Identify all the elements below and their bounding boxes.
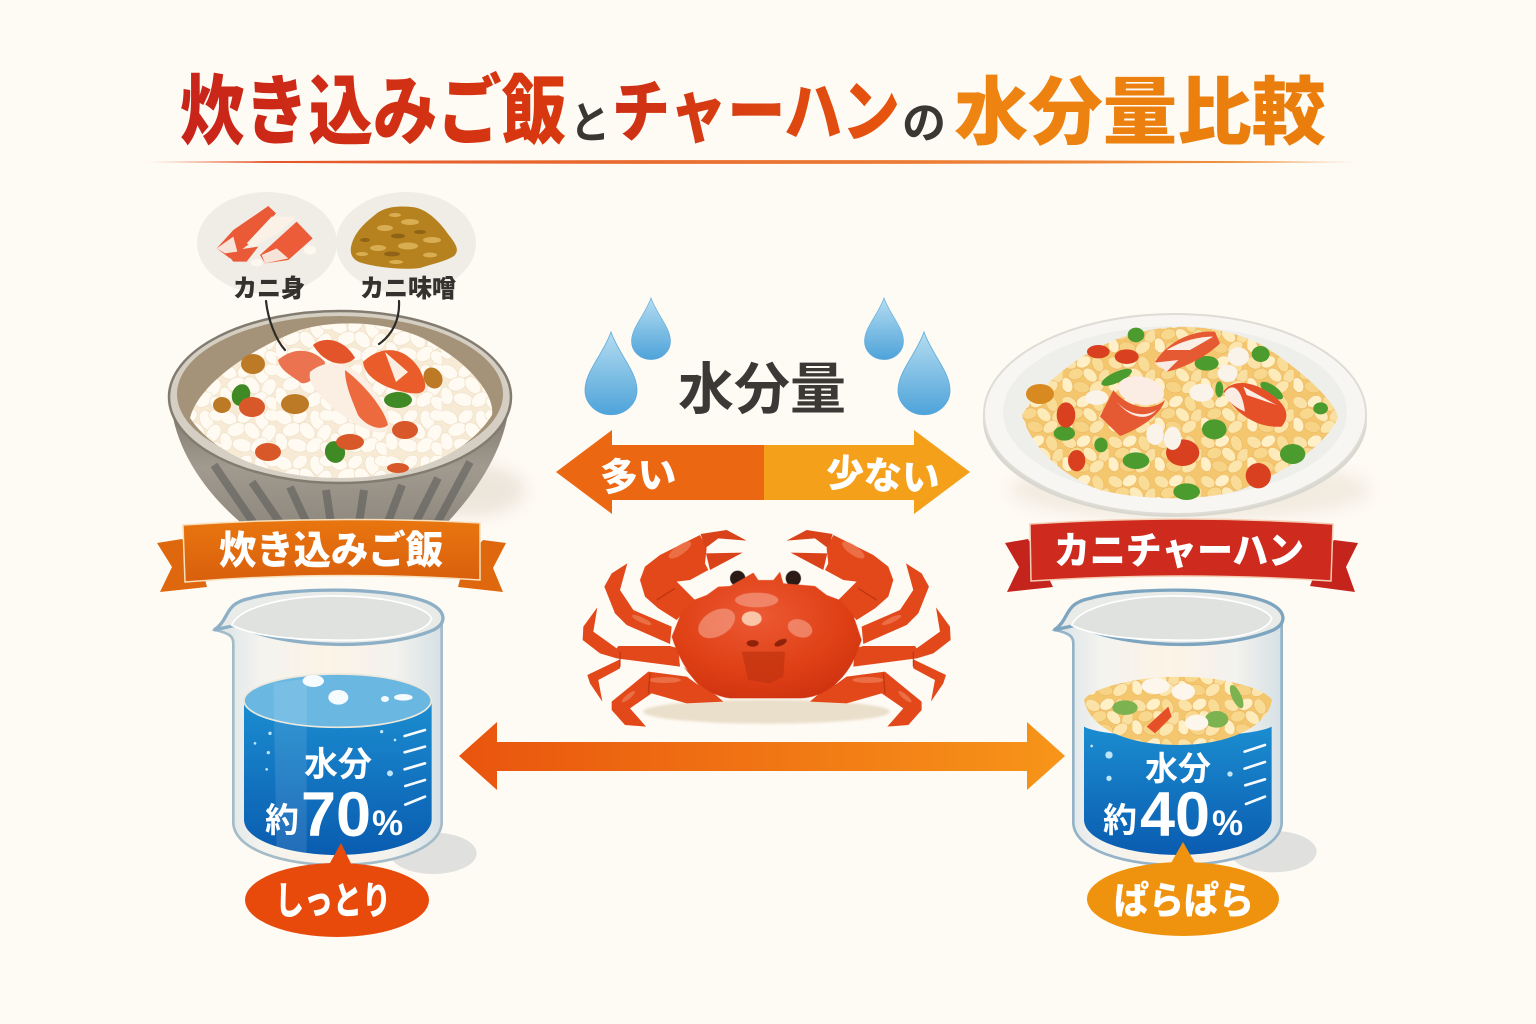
rice in beaker — [1084, 677, 1272, 745]
panel: beaker fried rice — [1054, 590, 1317, 936]
icon: crab — [583, 530, 951, 727]
crab shell — [672, 572, 862, 698]
label: crab meat: カニ身 — [233, 269, 305, 305]
icon: water drops — [585, 298, 950, 415]
crab eyes — [730, 571, 801, 586]
panel: takikomi rice — [169, 192, 525, 530]
title: と — [570, 87, 610, 151]
left legs and claw — [583, 530, 747, 727]
title: の — [902, 87, 946, 151]
panel: fried rice — [983, 314, 1370, 520]
vegetables and crab pieces — [213, 340, 446, 473]
beaker drawing — [214, 590, 477, 874]
arrow: long comparison — [459, 722, 1065, 790]
title — [180, 50, 1326, 160]
value: about 70 percent — [265, 780, 403, 850]
leader lines — [266, 301, 399, 350]
heading: moisture: 水分量 — [678, 345, 846, 426]
icon: bowl — [169, 311, 511, 530]
arrow: more / less — [556, 430, 970, 514]
banner: fried rice — [1005, 519, 1358, 592]
arrow: more / less: 多い — [599, 443, 677, 502]
title: チャーハン — [612, 57, 900, 156]
plate shadow — [1010, 460, 1370, 520]
callout: fluffy — [1087, 842, 1279, 936]
callout: fluffy: ぱらぱら — [1114, 870, 1254, 925]
value: about 70 percent: 70 — [301, 780, 371, 850]
beaker drawing — [1054, 590, 1317, 872]
banner: takikomi rice — [157, 519, 506, 592]
value: about 70 percent: 約 — [265, 793, 299, 842]
value: about 70 percent: % — [372, 804, 403, 843]
label: moisture: 水分 — [304, 737, 372, 786]
value: about 40 percent — [1103, 780, 1243, 850]
ingredient: crab meat — [197, 192, 337, 294]
scale ticks — [405, 730, 425, 805]
value: about 40 percent: % — [1212, 804, 1243, 843]
panel: moisture scale — [556, 298, 970, 514]
callout: moist — [245, 843, 429, 937]
fried rice mound — [1022, 327, 1338, 498]
callout: moist: しっとり — [275, 870, 391, 925]
right legs and claw — [787, 530, 951, 727]
ingredient: crab miso — [336, 192, 476, 294]
bowl shadow — [415, 464, 525, 516]
scale ticks — [1245, 745, 1265, 804]
panel: beaker takikomi — [214, 590, 477, 937]
label: crab miso: カニ味噌 — [360, 269, 456, 305]
label: moisture: 水分 — [1145, 742, 1211, 790]
vegetables and crab pieces — [1026, 328, 1328, 500]
banner label: カニチャーハン — [1054, 520, 1304, 575]
title underline — [145, 160, 1358, 164]
value: about 40 percent: 40 — [1140, 780, 1210, 850]
icon: plate — [983, 314, 1367, 517]
arrow: more / less: 少ない — [825, 442, 941, 503]
value: about 40 percent: 約 — [1103, 793, 1137, 842]
title: 水分量比較 — [954, 53, 1326, 160]
title: 炊き込みご飯 — [180, 50, 566, 160]
banner label: 炊き込みご飯 — [219, 520, 443, 576]
